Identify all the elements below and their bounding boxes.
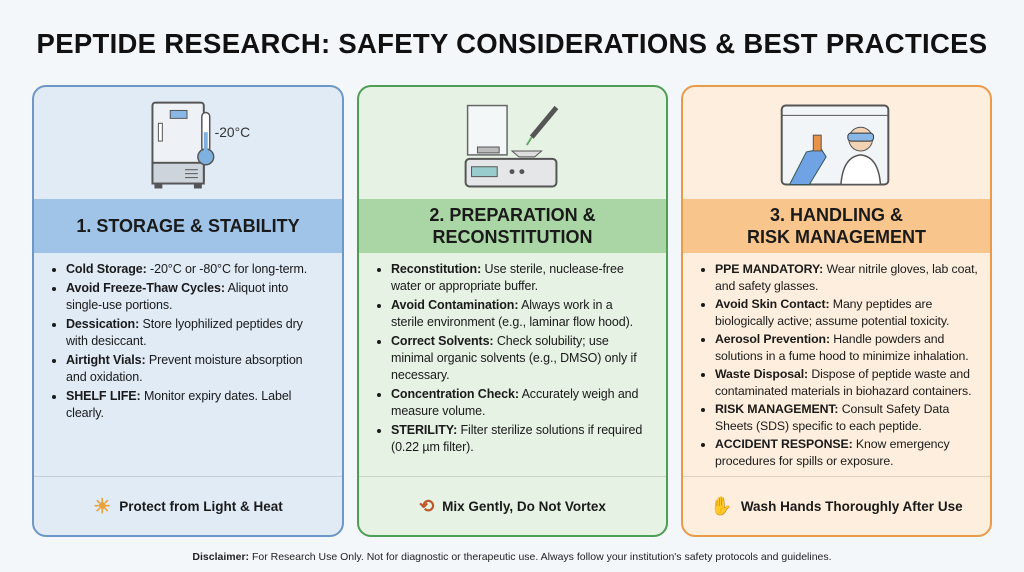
panel: handling bbox=[681, 85, 992, 537]
heading bbox=[683, 199, 990, 253]
footer: light: ☀ bbox=[93, 496, 111, 518]
icon: balance bbox=[464, 104, 558, 188]
list: Waste Disposal: Dispose of peptide waste and contaminated materials in biohazard containers. bbox=[715, 367, 971, 398]
list: RISK MANAGEMENT: Consult Safety Data Sheets (SDS) specific to each peptide. bbox=[715, 402, 949, 432]
list: ACCIDENT RESPONSE: Know emergency procedures for spills or exposure. bbox=[715, 437, 950, 468]
heading: 1. STORAGE & STABILITY bbox=[76, 216, 300, 236]
heading bbox=[34, 199, 342, 253]
list: STERILITY: Filter sterilize solutions if required (0.22 µm filter). bbox=[391, 423, 642, 454]
list: Avoid Contamination: Always work in a sterile environment (e.g., laminar flow hood). bbox=[391, 298, 633, 329]
list: Reconstitution: Use sterile, nuclease-free water or appropriate buffer. bbox=[391, 262, 624, 293]
footer: mix bbox=[359, 476, 666, 535]
list: PPE MANDATORY: Wear nitrile gloves, lab coat, and safety glasses. bbox=[715, 262, 978, 292]
heading: RECONSTITUTION bbox=[432, 227, 592, 247]
list bbox=[377, 262, 642, 454]
footer: mix: ⟲ bbox=[419, 496, 434, 516]
panel: preparation bbox=[357, 85, 668, 537]
footer: wash hands: ✋ bbox=[710, 496, 733, 516]
list: Aerosol Prevention: Handle powders and solutions in a fume hood to minimize inhalation. bbox=[715, 332, 969, 362]
heading: 2. PREPARATION & bbox=[429, 205, 596, 225]
heading bbox=[359, 199, 666, 253]
list: Correct Solvents: Check solubility; use minimal organic solvents (e.g., DMSO) only if necessary. bbox=[391, 334, 637, 382]
heading: 3. HANDLING & bbox=[770, 205, 903, 225]
list: Concentration Check: Accurately weigh and measure volume. bbox=[391, 387, 638, 418]
list: SHELF LIFE: Monitor expiry dates. Label clearly. bbox=[66, 389, 291, 420]
list bbox=[701, 262, 978, 468]
footer: light bbox=[34, 476, 342, 535]
footer: light: Protect from Light & Heat bbox=[119, 498, 283, 514]
heading: RISK MANAGEMENT bbox=[747, 227, 926, 247]
panel: storage bbox=[32, 85, 344, 537]
disclaimer: Disclaimer: For Research Use Only. Not for diagnostic or therapeutic use. Always follow your institution's safety protocols and guidelines. bbox=[192, 551, 832, 563]
footer: wash hands: Wash Hands Thoroughly After Use bbox=[741, 498, 963, 514]
list: Dessication: Store lyophilized peptides dry with desiccant. bbox=[66, 317, 303, 348]
title: PEPTIDE RESEARCH: SAFETY CONSIDERATIONS & BEST PRACTICES bbox=[37, 28, 987, 59]
list: Airtight Vials: Prevent moisture absorption and oxidation. bbox=[66, 353, 303, 384]
footer: mix: Mix Gently, Do Not Vortex bbox=[442, 498, 606, 514]
list: Cold Storage: -20°C or -80°C for long-term. bbox=[66, 262, 307, 276]
footer: wash hands bbox=[683, 476, 990, 535]
list: Avoid Freeze-Thaw Cycles: Aliquot into single-use portions. bbox=[66, 281, 288, 312]
icon: freezer: -20°C bbox=[215, 124, 250, 140]
icon: freezer bbox=[151, 102, 250, 188]
list bbox=[52, 262, 307, 420]
list: Avoid Skin Contact: Many peptides are biologically active; assume potential toxicity. bbox=[715, 297, 949, 328]
icon: scientist bbox=[780, 104, 890, 186]
